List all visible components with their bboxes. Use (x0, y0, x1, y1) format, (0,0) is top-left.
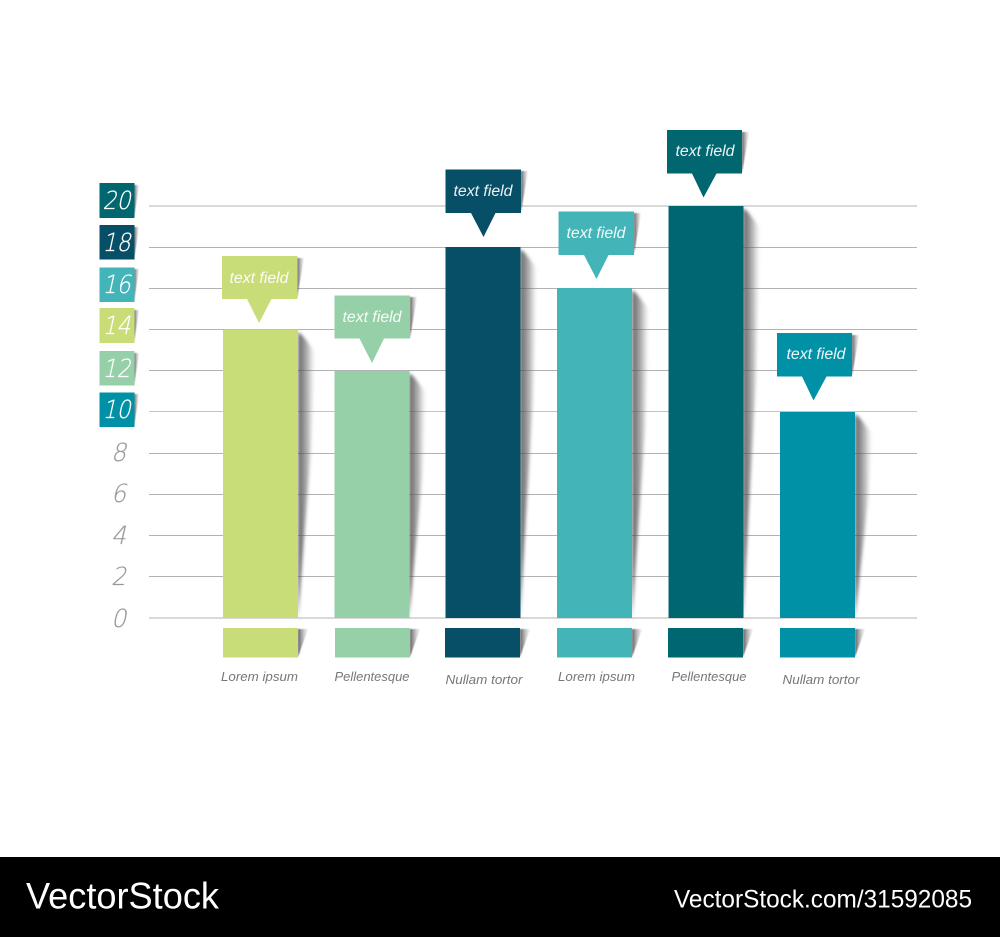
watermark footer bar (0, 857, 1000, 937)
callout 5 (667, 130, 749, 198)
legend tag 12: 12 (102, 354, 131, 383)
bar 6: 10 (780, 412, 872, 618)
base swatch 3 (445, 628, 530, 658)
legend tag 10 (100, 392, 139, 427)
legend tag 14 (100, 308, 139, 343)
y axis labels (111, 438, 128, 633)
category labels: Nullam tortor (446, 672, 523, 687)
base swatch 4 (557, 628, 642, 658)
y axis labels: 4 (111, 521, 126, 550)
brand name: VectorStock (26, 876, 219, 916)
callout 2: text field (342, 309, 403, 326)
callout 2 (334, 296, 417, 363)
legend tag 14: 14 (102, 311, 131, 340)
callout 6: text field (786, 346, 847, 363)
callout 5: text field (676, 143, 736, 160)
bar 4: 16 (557, 288, 649, 618)
legend tag 18 (100, 225, 139, 260)
base swatch 1 (223, 628, 308, 658)
image url: VectorStock.com/31592085 (674, 886, 972, 914)
bar 2: 12 (334, 371, 426, 618)
y axis legend (100, 183, 139, 427)
category labels: Lorem ipsum (558, 669, 635, 684)
base swatch 2 (335, 628, 420, 658)
legend tag 12 (100, 351, 139, 386)
legend tag 16 (100, 268, 139, 302)
category labels: Pellentesque (672, 669, 746, 684)
category labels: Lorem ipsum (221, 669, 298, 684)
callout 1 (222, 256, 304, 323)
callout 3: text field (454, 183, 514, 200)
bar 5: 20 (668, 206, 760, 618)
legend tag 16: 16 (102, 270, 132, 299)
callout 4: text field (566, 225, 627, 242)
y axis labels: 2 (111, 562, 127, 591)
legend tag 18: 18 (102, 228, 132, 257)
y axis labels: 0 (111, 604, 128, 633)
callout 6 (777, 333, 859, 400)
callout 1: text field (230, 270, 290, 287)
callout 3 (446, 170, 528, 237)
category labels (221, 669, 860, 687)
category labels: Pellentesque (334, 669, 410, 684)
callout 4 (558, 212, 641, 279)
legend tag 10: 10 (102, 395, 132, 424)
y axis labels: 6 (111, 479, 128, 508)
legend tag 20 (100, 183, 139, 218)
base swatch 5 (668, 628, 753, 658)
y axis labels: 8 (111, 438, 128, 467)
legend tag 20: 20 (102, 186, 132, 215)
base swatch 6 (780, 628, 865, 658)
bar 3: 18 (446, 247, 537, 618)
bar 1: 14 (223, 330, 315, 618)
category labels: Nullam tortor (782, 672, 860, 687)
